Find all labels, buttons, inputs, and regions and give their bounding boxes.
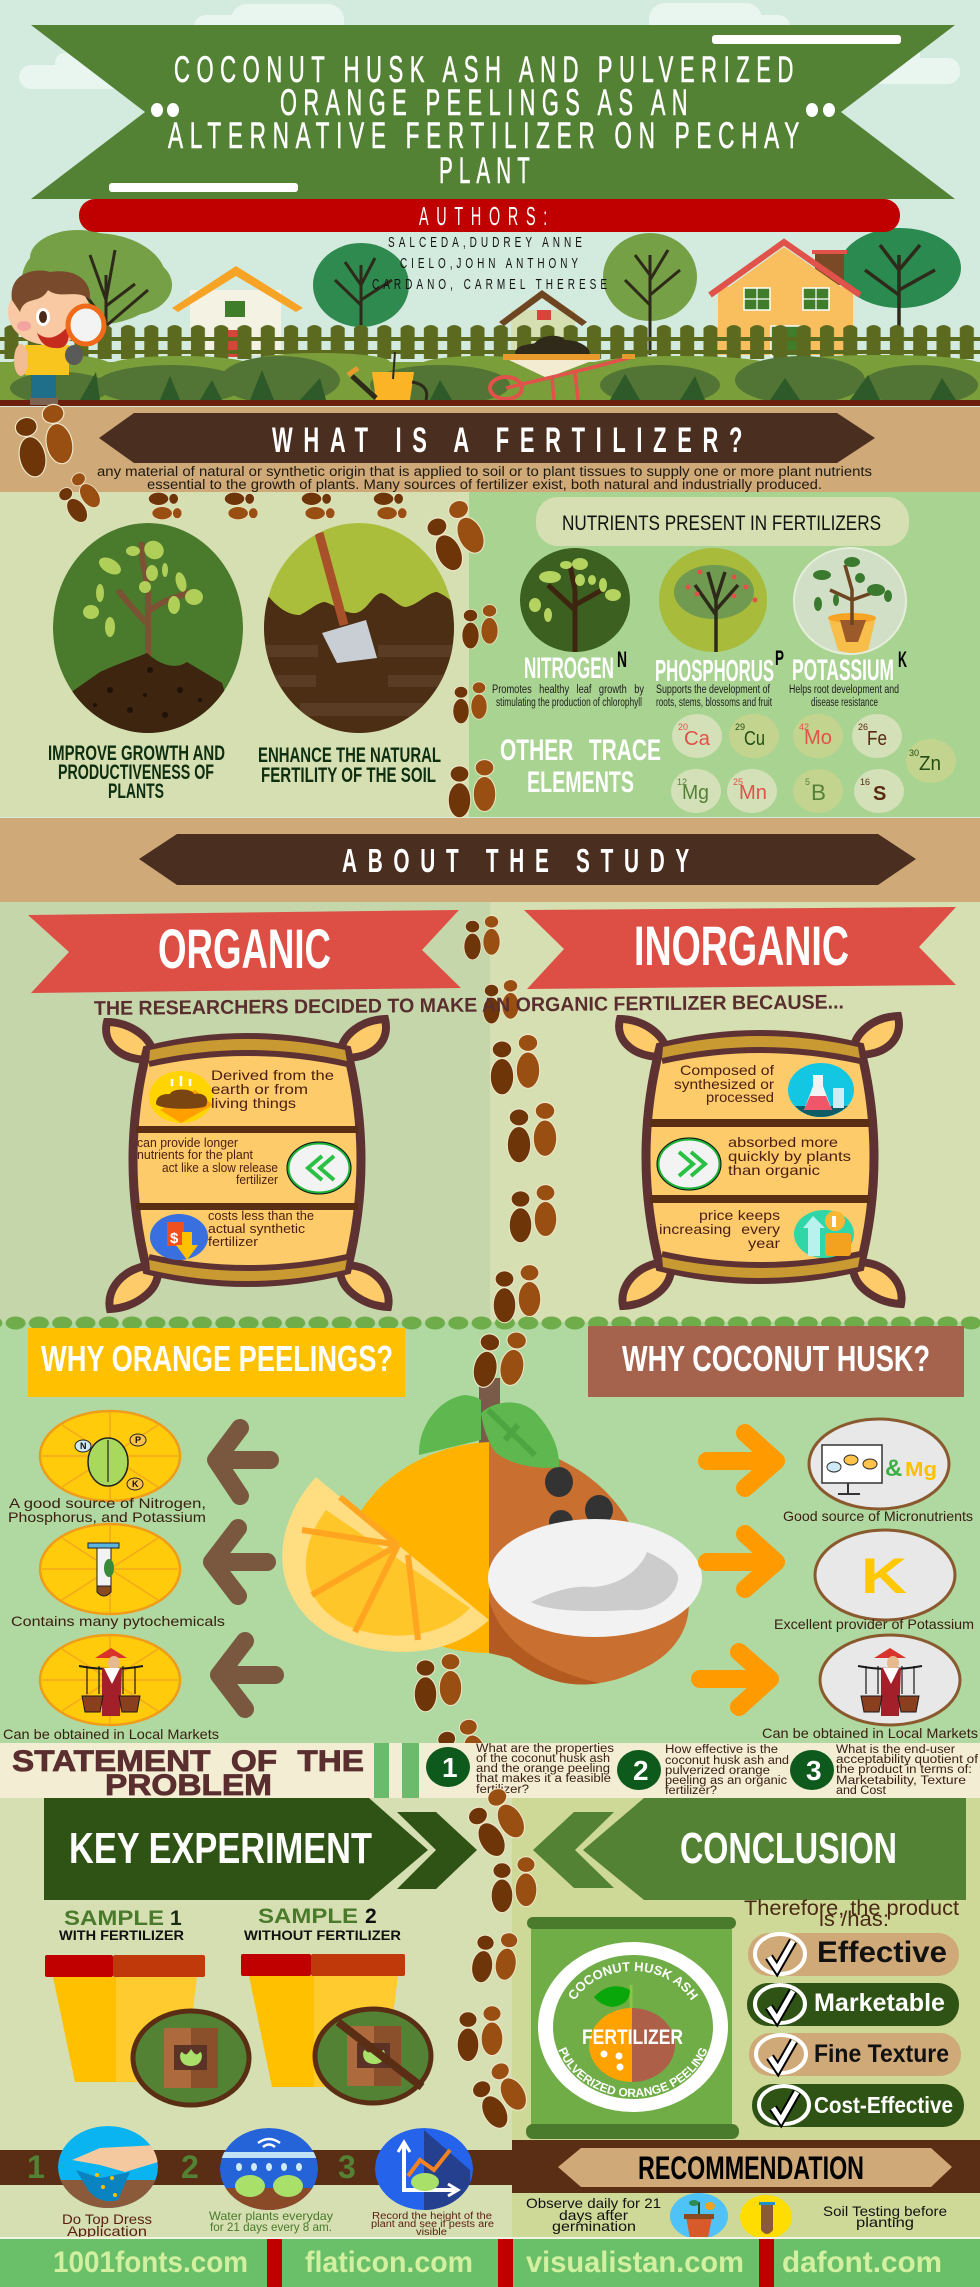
organic ribbon: ORGANIC	[158, 917, 331, 980]
step 1 caption	[62, 2211, 152, 2239]
caption: growth	[48, 742, 225, 803]
question 2: How effective is the	[665, 1744, 778, 1756]
potassium label	[789, 647, 907, 709]
left arrows	[212, 1428, 275, 1709]
sample 2: 2	[365, 1905, 377, 1928]
title text	[168, 49, 806, 191]
label: PULVERIZED ORANGE PEELING	[558, 2047, 707, 2097]
title text: PLANT	[439, 150, 536, 191]
panel: statement of the problem	[0, 1743, 980, 1802]
trace element tokens: 25	[733, 777, 743, 787]
trace element tokens: 20	[678, 722, 688, 732]
trace element tokens: Cu	[744, 728, 765, 750]
step 2 caption: Water plants everyday	[209, 2209, 333, 2223]
coconut benefits	[762, 1419, 978, 1741]
tree 4	[839, 228, 961, 327]
orange slice	[282, 1477, 489, 1652]
source sites: dafont.com	[782, 2246, 942, 2279]
badge: micronutrients monitor: Mg	[905, 1459, 937, 1481]
ground strip	[0, 400, 980, 406]
reason: cost: actual synthetic	[208, 1221, 306, 1236]
phosphorus label: Supports the development of	[656, 684, 771, 696]
ribbon highlights	[109, 35, 901, 192]
icon: potted seedling	[670, 2193, 728, 2239]
panel: nutrients	[469, 492, 980, 817]
clouds	[19, 3, 960, 89]
label: COCONUT HUSK ASH	[569, 1962, 698, 2000]
badge: potassium	[815, 1530, 955, 1620]
garden scene	[0, 228, 980, 406]
caption: NPK	[8, 1495, 206, 1525]
reason: synthesized	[674, 1062, 774, 1105]
trace element tokens: Ca	[684, 728, 711, 750]
result: fine texture: Fine Texture	[814, 2040, 949, 2068]
caption: fertility: FERTILITY OF THE SOIL	[261, 764, 436, 787]
watering can	[348, 352, 427, 400]
question 3: and Cost	[836, 1785, 887, 1797]
section: what is a fertilizer	[0, 407, 980, 492]
icon: price tag	[150, 1214, 208, 1260]
trace element tokens	[671, 714, 956, 813]
potassium label: K	[898, 647, 907, 672]
reason: price: price keeps	[699, 1207, 780, 1223]
trace element tokens: 30	[909, 748, 919, 758]
reason: price: year	[748, 1235, 780, 1251]
source sites: 1001fonts.com	[53, 2246, 248, 2279]
heading: PROBLEM	[105, 1769, 272, 1802]
author names: CIELO,JOHN ANTHONY	[400, 255, 582, 272]
badge: potassium: K	[861, 1548, 907, 1604]
recommendation heading: RECOMMENDATION	[638, 2150, 864, 2186]
reason: slow release: can provide longer	[137, 1135, 239, 1150]
icon: soil test tube	[740, 2195, 792, 2239]
steps strip: 3	[338, 2149, 356, 2185]
fence	[0, 325, 980, 359]
title banner	[31, 25, 955, 199]
panel background	[512, 1798, 980, 2238]
sample 1	[45, 1907, 249, 2105]
bushes	[0, 353, 980, 405]
panel: key experiment	[0, 1798, 512, 2239]
inorganic ribbon: INORGANIC	[634, 914, 849, 977]
band background	[0, 1743, 980, 1798]
heading banner	[139, 834, 916, 885]
step 3 caption: Record the height of the	[372, 2211, 492, 2222]
heading: STATEMENT OF THE	[12, 1745, 364, 1778]
sample 2: SAMPLE	[258, 1905, 358, 1928]
result: cost-effective	[752, 2084, 964, 2127]
definition text: essential to the growth of plants. Many sources of fertilizer exist, both natural and industrially produced.	[147, 477, 822, 492]
trace element tokens: 29	[735, 722, 745, 732]
heading	[12, 1745, 364, 1802]
panel background	[0, 1798, 512, 2238]
question 1	[426, 1743, 614, 1796]
caption: growth: PRODUCTIVENESS OF	[58, 761, 214, 784]
heading: ABOUT THE STUDY	[342, 842, 700, 879]
reason: slow release: fertilizer	[236, 1172, 279, 1187]
sample 1: 1	[170, 1907, 182, 1930]
badge: NPK leaf: P	[135, 1435, 141, 1445]
question 2: peeling as an organic	[665, 1775, 787, 1787]
caption: phytochemicals: Contains many pytochemicals	[11, 1613, 225, 1629]
reason: fast absorption: quickly by plants	[728, 1148, 851, 1164]
result: fine texture	[749, 2033, 961, 2076]
panel background	[0, 1322, 980, 1743]
icon: nitrogen tree	[520, 548, 630, 652]
question 3: Marketability, Texture	[836, 1775, 966, 1787]
reason: fast absorption: absorbed more	[728, 1134, 838, 1150]
question 2: 2	[633, 1755, 649, 1786]
reason: cost: fertilizer	[208, 1234, 259, 1249]
why orange heading: WHY ORANGE PEELINGS?	[41, 1338, 393, 1379]
heading arrow: CONCLUSION	[680, 1824, 897, 1873]
sack dividers	[650, 1119, 870, 1203]
trace element tokens: 26	[858, 722, 868, 732]
sample 2	[241, 1905, 431, 2103]
caption: fertility	[258, 744, 441, 787]
trace element tokens: S	[873, 783, 886, 805]
panel: organic vs inorganic	[0, 902, 980, 1322]
reason: natural origin: living things	[211, 1095, 296, 1111]
reason: synthesized: synthesized or	[674, 1076, 774, 1092]
steps strip: 2	[181, 2149, 199, 2185]
reason: natural origin	[211, 1067, 334, 1111]
boy with magnifying glass	[8, 270, 104, 405]
coconut half	[489, 1442, 689, 1685]
recommendation: observe: days after	[559, 2207, 628, 2223]
steps strip	[0, 2149, 512, 2185]
tan background	[0, 818, 980, 902]
reason: fast absorption: than organic	[728, 1162, 820, 1178]
potassium label: disease resistance	[811, 697, 878, 709]
sample 2: WITHOUT FERTILIZER	[244, 1927, 401, 1943]
can caps	[526, 1917, 739, 2139]
reason: synthesized: Composed of	[680, 1062, 774, 1078]
trace element tokens: 42	[799, 722, 809, 732]
question 1: 1	[442, 1752, 458, 1783]
question 3: 3	[806, 1755, 822, 1786]
ribbon shape	[31, 25, 955, 199]
house 1	[172, 266, 303, 357]
potassium label: Helps root development and	[789, 684, 899, 696]
caption: NPK: A good source of Nitrogen,	[9, 1495, 206, 1511]
trace element tokens: 12	[677, 777, 687, 787]
icon: potassium pot plant	[794, 548, 906, 654]
recommendation: observe: Observe daily for 21	[526, 2195, 661, 2211]
caption: NPK: Phosphorus, and Potassium	[8, 1509, 206, 1525]
definition text: any material of natural or synthetic origin that is applied to soil or to plant tissues to supply one or more plant nutrients	[97, 464, 872, 479]
nutrients heading	[536, 497, 909, 546]
panel: conclusion	[512, 1798, 980, 2237]
step 2 caption: for 21 days every 8 am.	[210, 2220, 332, 2234]
panel backgrounds	[0, 902, 980, 1322]
nitrogen label: N	[617, 647, 627, 672]
central fruit illustration	[282, 1378, 702, 1685]
house 2	[499, 290, 587, 355]
question 1: fertilizer?	[476, 1784, 529, 1796]
trace element tokens: Mn	[739, 782, 767, 804]
recommendation: soil testing: Soil Testing before	[823, 2203, 947, 2219]
recommendation: soil testing: planting	[856, 2214, 914, 2230]
icon: price tag: $	[170, 1230, 179, 1247]
trace element tokens: Mg	[682, 782, 709, 804]
recommendation: observe	[526, 2195, 661, 2234]
heading arrow: KEY EXPERIMENT	[69, 1824, 372, 1873]
source sites: visualistan.com	[526, 2246, 744, 2279]
illustration: growing plant	[53, 523, 243, 740]
reason: natural origin: earth or from	[211, 1081, 308, 1097]
phosphorus label: PHOSPHORUS	[655, 653, 774, 688]
authors pill	[79, 199, 900, 232]
section: about the study	[0, 818, 980, 902]
page background	[0, 0, 980, 407]
caption: fertility: ENHANCE THE NATURAL	[258, 744, 441, 767]
panel: why orange and coconut	[0, 1314, 980, 1743]
title text: ORANGE PEELINGS AS AN	[280, 82, 694, 123]
question 3: acceptability quotient of	[836, 1754, 979, 1766]
question 2: pulverized orange	[665, 1765, 770, 1777]
trace element tokens: Mo	[804, 727, 832, 749]
can body	[531, 1925, 732, 2130]
phosphorus label: roots, stems, blossoms and fruit	[656, 697, 773, 709]
trace element tokens: Fe	[867, 728, 887, 750]
heading arrow	[44, 1798, 477, 1900]
other trace elements	[500, 734, 661, 799]
step 1 icon	[58, 2126, 158, 2210]
result: cost-effective: Cost-Effective	[814, 2092, 953, 2118]
icon: phosphorus tree	[659, 548, 767, 652]
reason: natural origin: Derived from the	[211, 1067, 334, 1083]
recommendation: soil testing	[823, 2203, 947, 2230]
reason: slow release: act like a slow release	[162, 1160, 278, 1175]
caption: local markets: Can be obtained in Local Markets	[3, 1726, 219, 1742]
steps strip: 1	[27, 2149, 45, 2185]
badge: local market	[40, 1635, 180, 1725]
caption: growth: IMPROVE GROWTH AND	[48, 742, 225, 765]
product statement: is /has:	[819, 1908, 889, 1931]
author names: SALCEDA,DUDREY ANNE	[388, 234, 586, 251]
nitrogen label: NITROGEN	[524, 652, 614, 685]
decorative bars	[374, 1743, 419, 1798]
badge: test tube	[40, 1524, 180, 1614]
source sites: flaticon.com	[305, 2246, 473, 2279]
other trace elements: OTHER TRACE	[500, 734, 661, 767]
right arrows	[700, 1433, 776, 1707]
tan background	[0, 407, 980, 492]
heading arrow	[533, 1798, 966, 1900]
badge: micronutrients monitor	[809, 1419, 949, 1509]
question 3: the product in terms of:	[836, 1764, 972, 1776]
result: effective: Effective	[817, 1936, 947, 1969]
author names: CARDANO, CARMEL THERESE	[372, 276, 611, 293]
tree 3	[603, 233, 697, 355]
question 1: of the coconut husk ash	[476, 1753, 610, 1765]
panel background	[0, 492, 469, 817]
reason: cost: costs less than the	[208, 1208, 314, 1223]
other trace elements: ELEMENTS	[527, 766, 634, 799]
caption: potassium: Excellent provider of Potassium	[774, 1616, 974, 1632]
reason: price	[659, 1207, 780, 1251]
coconut flesh	[488, 1519, 702, 1637]
question 1: What are the properties	[476, 1743, 614, 1755]
inorganic sack	[619, 1016, 902, 1306]
footprint trail, lower	[457, 1784, 537, 2133]
question 3	[790, 1744, 979, 1797]
question 2: fertilizer?	[665, 1785, 717, 1797]
reason: price: increasing every	[659, 1221, 780, 1237]
nitrogen label: Promotes healthy leaf growth by	[492, 684, 644, 696]
product statement	[744, 1897, 959, 1931]
tree 2	[313, 243, 409, 327]
question 3: What is the end-user	[836, 1744, 955, 1756]
authors	[79, 199, 900, 293]
badge: local market	[820, 1635, 960, 1725]
icon: earth	[149, 1071, 213, 1123]
reason: cost	[208, 1208, 314, 1249]
panel: benefits	[0, 492, 469, 817]
inorganic ribbon	[524, 907, 956, 989]
definition text	[97, 464, 872, 492]
footer credits	[0, 2237, 980, 2287]
trace element tokens: Zn	[919, 753, 941, 775]
badge: NPK leaf	[40, 1411, 180, 1501]
trace element tokens: 16	[860, 777, 870, 787]
recommendation heading	[512, 2140, 980, 2193]
caption: growth: PLANTS	[108, 780, 164, 803]
nutrients heading: NUTRIENTS PRESENT IN FERTILIZERS	[562, 512, 881, 535]
step 3 caption: visible	[416, 2227, 447, 2238]
question 1: that makes it a feasible	[476, 1773, 611, 1785]
step 1 caption: Do Top Dress	[62, 2211, 152, 2227]
dotted divider	[0, 1314, 980, 1332]
authors heading: AUTHORS:	[419, 201, 555, 231]
footer background	[0, 2237, 980, 2287]
sack dividers	[136, 1126, 358, 1210]
result: marketable	[747, 1983, 959, 2026]
potassium label: POTASSIUM	[792, 654, 894, 687]
nitrogen label	[492, 647, 644, 709]
reason: fast absorption	[728, 1134, 851, 1178]
wheelbarrow	[490, 336, 635, 400]
illustration: shovel in soil	[264, 523, 454, 740]
phosphorus label	[655, 647, 784, 709]
badge: NPK leaf: N	[80, 1441, 86, 1451]
reason heading: THE RESEARCHERS DECIDED TO MAKE AN ORGANIC FERTILIZER BECAUSE...	[94, 991, 844, 1020]
organic sack	[106, 1019, 389, 1309]
fertilizer can	[526, 1917, 739, 2139]
icon: lab flask	[788, 1063, 854, 1117]
tree 1	[22, 230, 172, 355]
orange benefits	[3, 1411, 225, 1742]
author names	[372, 234, 611, 293]
leaves	[419, 1395, 559, 1468]
reason: synthesized: processed	[706, 1089, 774, 1105]
reason: slow release	[137, 1135, 279, 1187]
product statement: Therefore, the product	[744, 1897, 959, 1920]
orange half	[347, 1442, 489, 1653]
separators	[267, 2239, 774, 2287]
icon: rising coins	[794, 1210, 854, 1258]
recommendation: observe: germination	[552, 2218, 636, 2234]
source sites	[53, 2246, 942, 2279]
footprint trail, upper	[10, 402, 557, 1783]
question 1: and the orange peeling	[476, 1763, 610, 1775]
sample 1: WITH FERTILIZER	[59, 1927, 184, 1943]
label: FERTILIZER	[582, 2026, 683, 2049]
question 2: coconut husk ash and	[665, 1755, 789, 1767]
organic ribbon	[28, 910, 461, 993]
nitrogen label: stimulating the production of chlorophyll	[496, 697, 642, 709]
trace element tokens: B	[811, 780, 826, 805]
step 3 caption: plant and see if pests are	[371, 2219, 494, 2230]
icon: fast forward	[657, 1138, 721, 1190]
caption: local markets: Can be obtained in Local Markets	[762, 1725, 978, 1741]
why orange heading	[28, 1328, 405, 1397]
trace element tokens: 5	[805, 777, 810, 787]
result: effective	[748, 1933, 959, 1976]
step 1 caption: Application	[67, 2223, 147, 2239]
panel background	[469, 492, 980, 817]
heading banner	[99, 413, 875, 463]
stem	[479, 1378, 500, 1446]
badge: NPK leaf: K	[132, 1479, 139, 1489]
house 3	[710, 242, 860, 356]
label	[538, 1942, 728, 2112]
sample 1: SAMPLE	[64, 1907, 164, 1930]
step 3 caption	[371, 2211, 494, 2238]
phosphorus label: P	[775, 647, 784, 670]
why coconut heading	[588, 1326, 964, 1397]
icon: rewind	[287, 1142, 351, 1194]
step 2 caption	[209, 2209, 333, 2234]
step 2 icon	[220, 2128, 320, 2213]
result: marketable: Marketable	[814, 1989, 945, 2017]
badge: micronutrients monitor: &	[885, 1455, 902, 1482]
caption: micronutrients: Good source of Micronutrients	[783, 1508, 973, 1524]
step 3 icon	[375, 2128, 473, 2210]
question 2	[617, 1744, 789, 1797]
reason: slow release: nutrients for the plant	[137, 1147, 253, 1162]
